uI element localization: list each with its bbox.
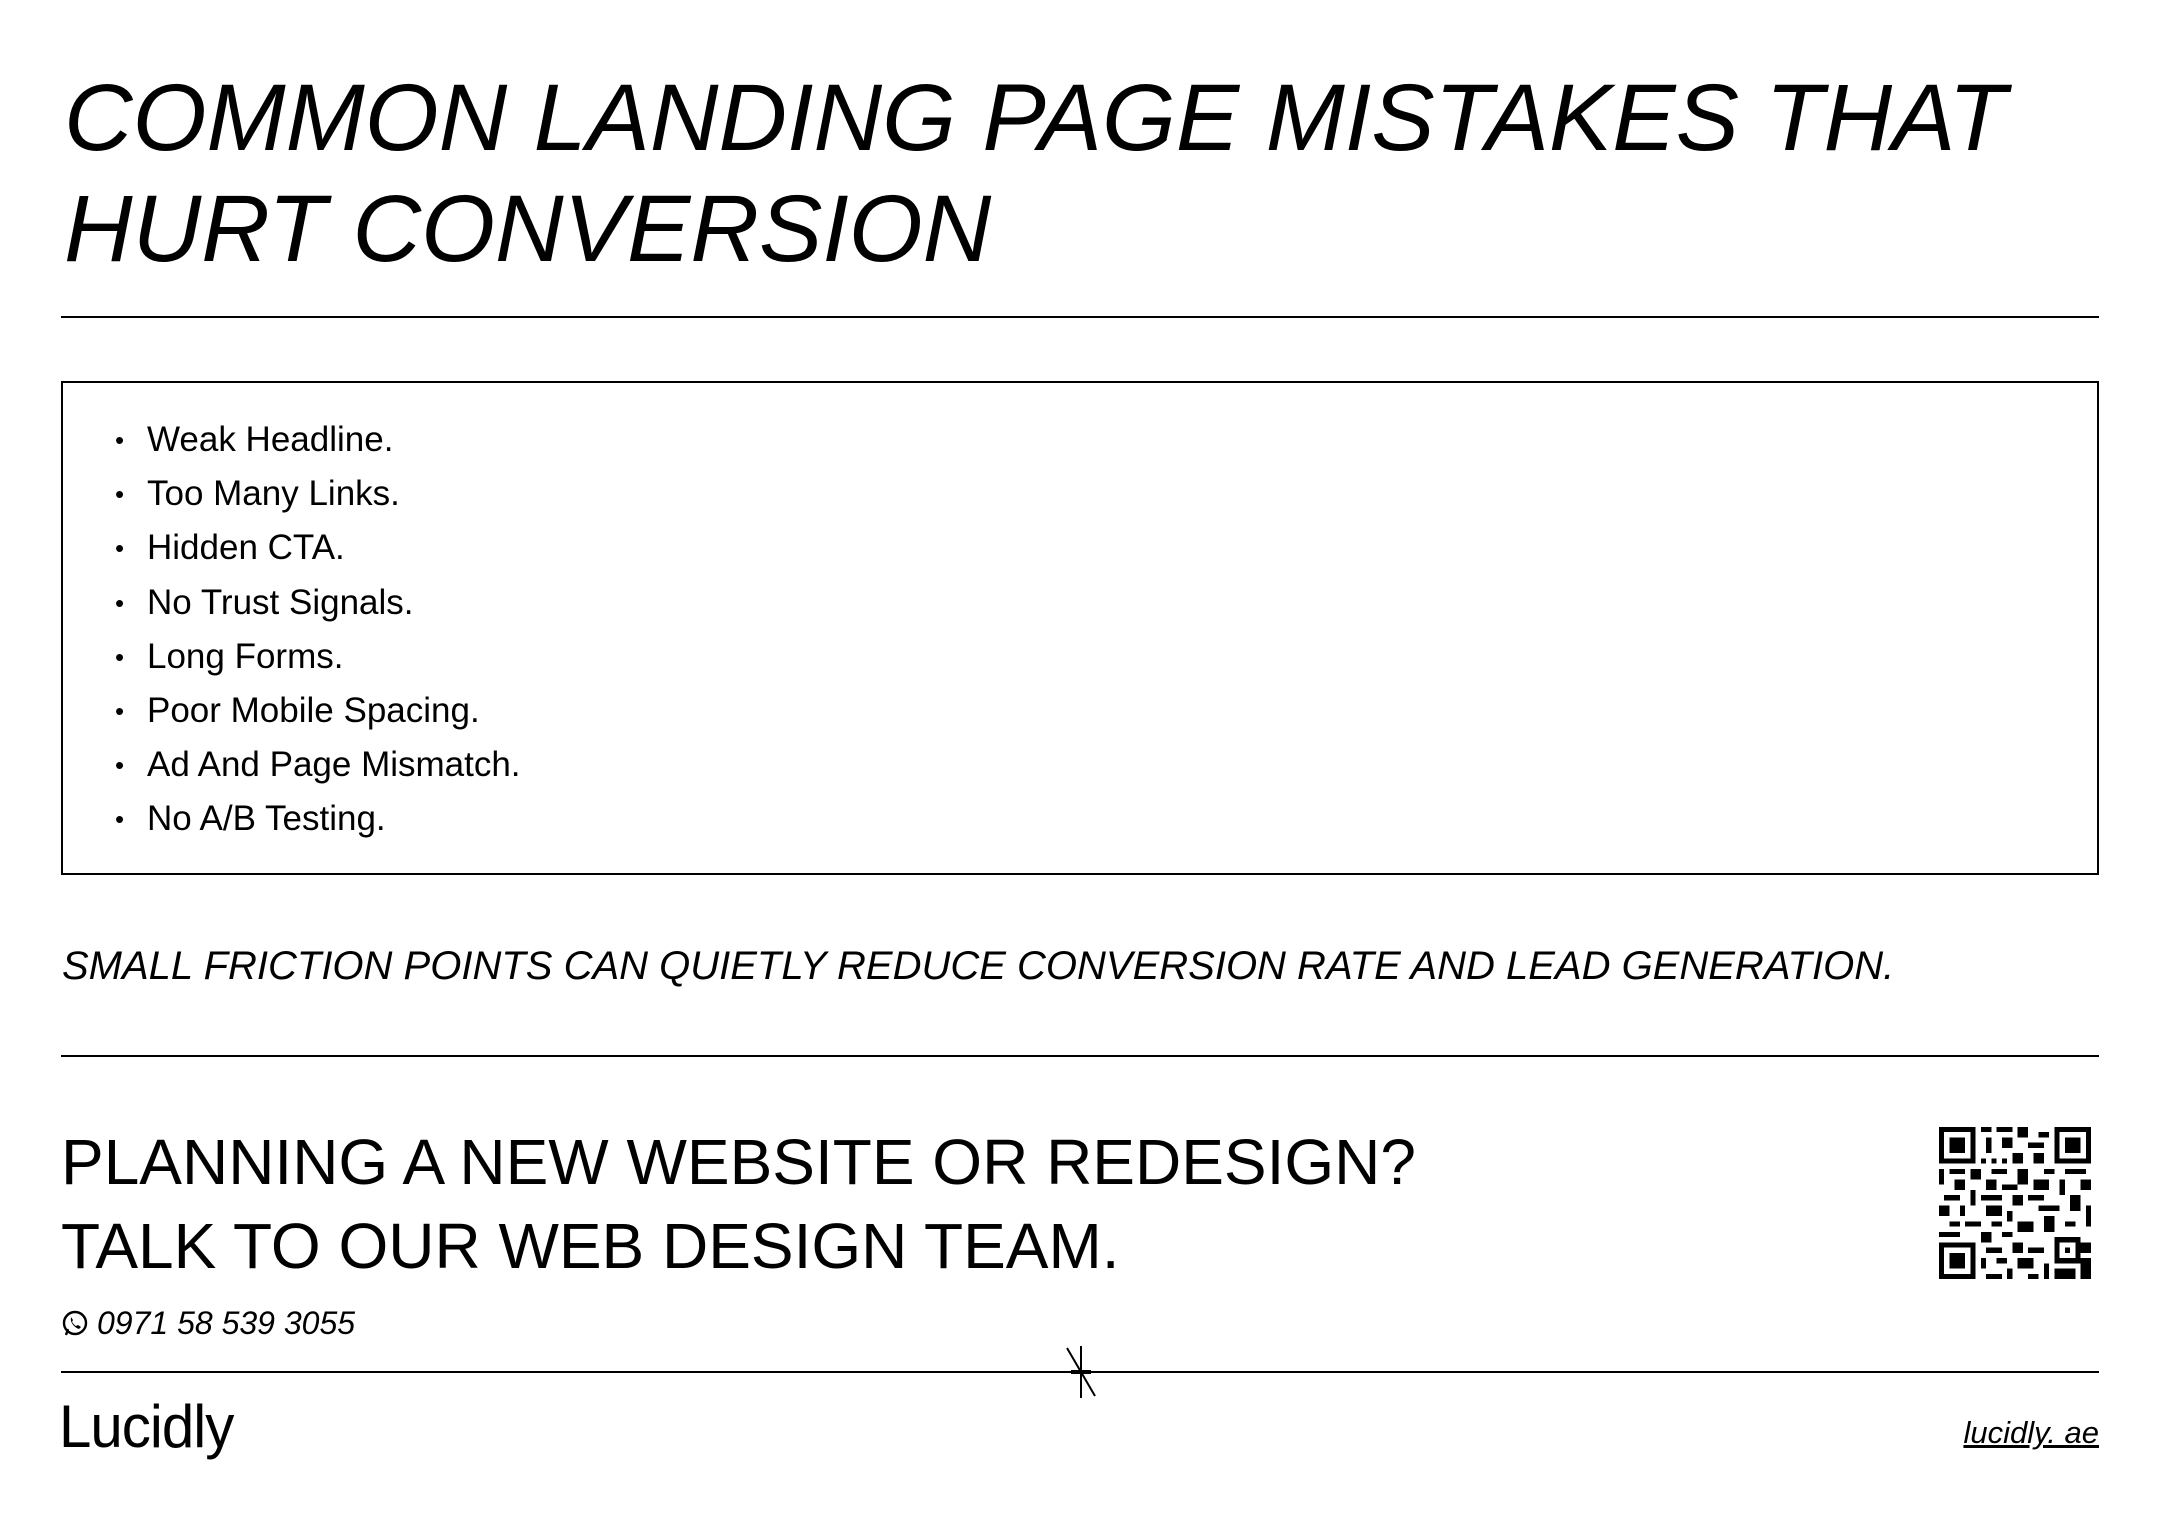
title: [64, 65, 2012, 282]
logo: Lucidly: [59, 1393, 233, 1460]
phone contact: 0971 58 539 3055: [97, 1305, 355, 1341]
call to action: TALK TO OUR WEB DESIGN TEAM.: [61, 1210, 1120, 1282]
call to action: PLANNING A NEW WEBSITE OR REDESIGN?: [61, 1126, 1416, 1198]
panel: mistakes list: Hidden CTA.: [147, 528, 345, 567]
panel: mistakes list: Long Forms.: [147, 637, 343, 676]
title: HURT CONVERSION: [64, 176, 991, 282]
call to action: [61, 1126, 1416, 1282]
panel: mistakes list: Ad And Page Mismatch.: [147, 745, 521, 784]
icon: star mark: [1066, 1346, 1096, 1398]
QR code: [1939, 1127, 2091, 1279]
panel: mistakes list: No A/B Testing.: [147, 799, 386, 838]
panel: mistakes list: Poor Mobile Spacing.: [147, 691, 480, 730]
title: COMMON LANDING PAGE MISTAKES THAT: [64, 65, 2006, 171]
panel: mistakes list: Too Many Links.: [147, 474, 400, 513]
panel: mistakes list: [61, 381, 2099, 875]
panel: mistakes list: Weak Headline.: [147, 420, 393, 459]
tagline: SMALL FRICTION POINTS CAN QUIETLY REDUCE CONVERSION RATE AND LEAD GENERATION.: [62, 944, 1894, 988]
panel: mistakes list: No Trust Signals.: [147, 583, 414, 622]
website link: lucidly. ae: [1963, 1415, 2099, 1450]
